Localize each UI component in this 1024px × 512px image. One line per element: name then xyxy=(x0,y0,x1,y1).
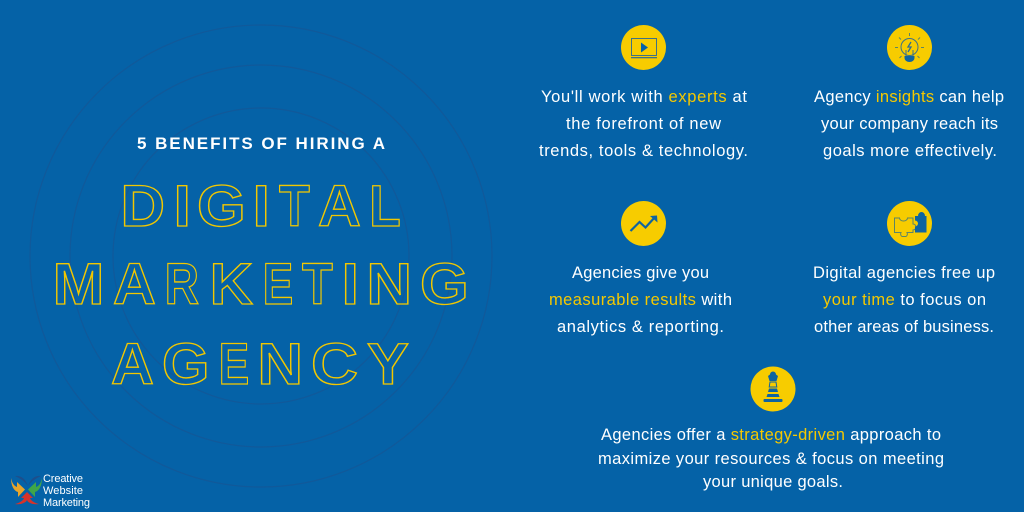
text: strategy: maximize your resources & focus on meeting xyxy=(598,450,944,468)
text: measurable results: Agencies give you xyxy=(572,264,709,282)
title: outlined headline: D xyxy=(120,172,165,239)
icon: rising chart arrow xyxy=(621,201,666,246)
title: outlined headline: G xyxy=(420,251,469,317)
text: experts: You'll work with experts at xyxy=(541,88,747,106)
title: outlined headline: M xyxy=(53,251,104,317)
benefit: experts xyxy=(539,25,748,160)
title: outlined headline xyxy=(53,172,469,397)
title: outlined headline: L xyxy=(369,173,401,239)
title: outlined headline: N xyxy=(257,331,303,397)
icon: logo arrows xyxy=(11,476,42,504)
benefit: insights xyxy=(814,25,1004,160)
benefit: your time xyxy=(813,201,995,336)
text: experts: the forefront of new xyxy=(566,115,721,133)
title: outlined headline: Y xyxy=(367,331,409,397)
benefit: strategy xyxy=(598,366,944,491)
text: measurable results: measurable results with xyxy=(549,291,732,309)
text: strategy: your unique goals. xyxy=(703,473,843,491)
title: outlined headline: C xyxy=(311,332,358,397)
title: outlined headline: A xyxy=(113,251,156,317)
text: logo wordmark: Website xyxy=(43,485,83,497)
text: your time: other areas of business. xyxy=(814,318,994,336)
text: logo wordmark: Marketing xyxy=(43,497,90,509)
icon: chess piece xyxy=(750,366,796,412)
title: outlined headline: N xyxy=(366,251,412,317)
title: outlined headline: R xyxy=(165,252,199,317)
text: insights: goals more effectively. xyxy=(823,142,997,160)
text: experts: trends, tools & technology. xyxy=(539,142,748,160)
text: measurable results: analytics & reporting. xyxy=(557,318,724,336)
icon: video player xyxy=(621,25,666,70)
text: your time: your time to focus on xyxy=(823,291,986,309)
title: outlined headline: I xyxy=(342,251,359,317)
title: outlined headline: T xyxy=(279,172,310,239)
icon: puzzle pieces xyxy=(887,201,932,246)
icon: light bulb xyxy=(887,25,932,70)
title: outlined headline: I xyxy=(252,173,270,239)
text: strategy: Agencies offer a strategy-driven approach to xyxy=(601,426,941,444)
text: insights: Agency insights can help xyxy=(814,88,1004,106)
title: outlined headline: G xyxy=(162,331,209,397)
text: logo wordmark xyxy=(43,473,90,509)
title: outlined headline: I xyxy=(174,173,191,239)
title: outlined headline: E xyxy=(263,252,293,317)
title: outlined headline: E xyxy=(219,332,249,397)
title: outlined headline: A xyxy=(318,173,361,239)
title: outlined headline: K xyxy=(210,251,253,317)
title: outlined headline: T xyxy=(302,250,333,317)
title: outlined headline: A xyxy=(111,331,154,397)
text: insights: your company reach its xyxy=(821,115,998,133)
subtitle: 5 BENEFITS OF HIRING A xyxy=(137,134,385,153)
title: outlined headline: G xyxy=(197,173,246,239)
logo: Creative Website Marketing xyxy=(11,473,90,509)
text: your time: Digital agencies free up xyxy=(813,264,995,282)
benefit: measurable results xyxy=(549,201,732,336)
text: logo wordmark: Creative xyxy=(43,473,83,485)
